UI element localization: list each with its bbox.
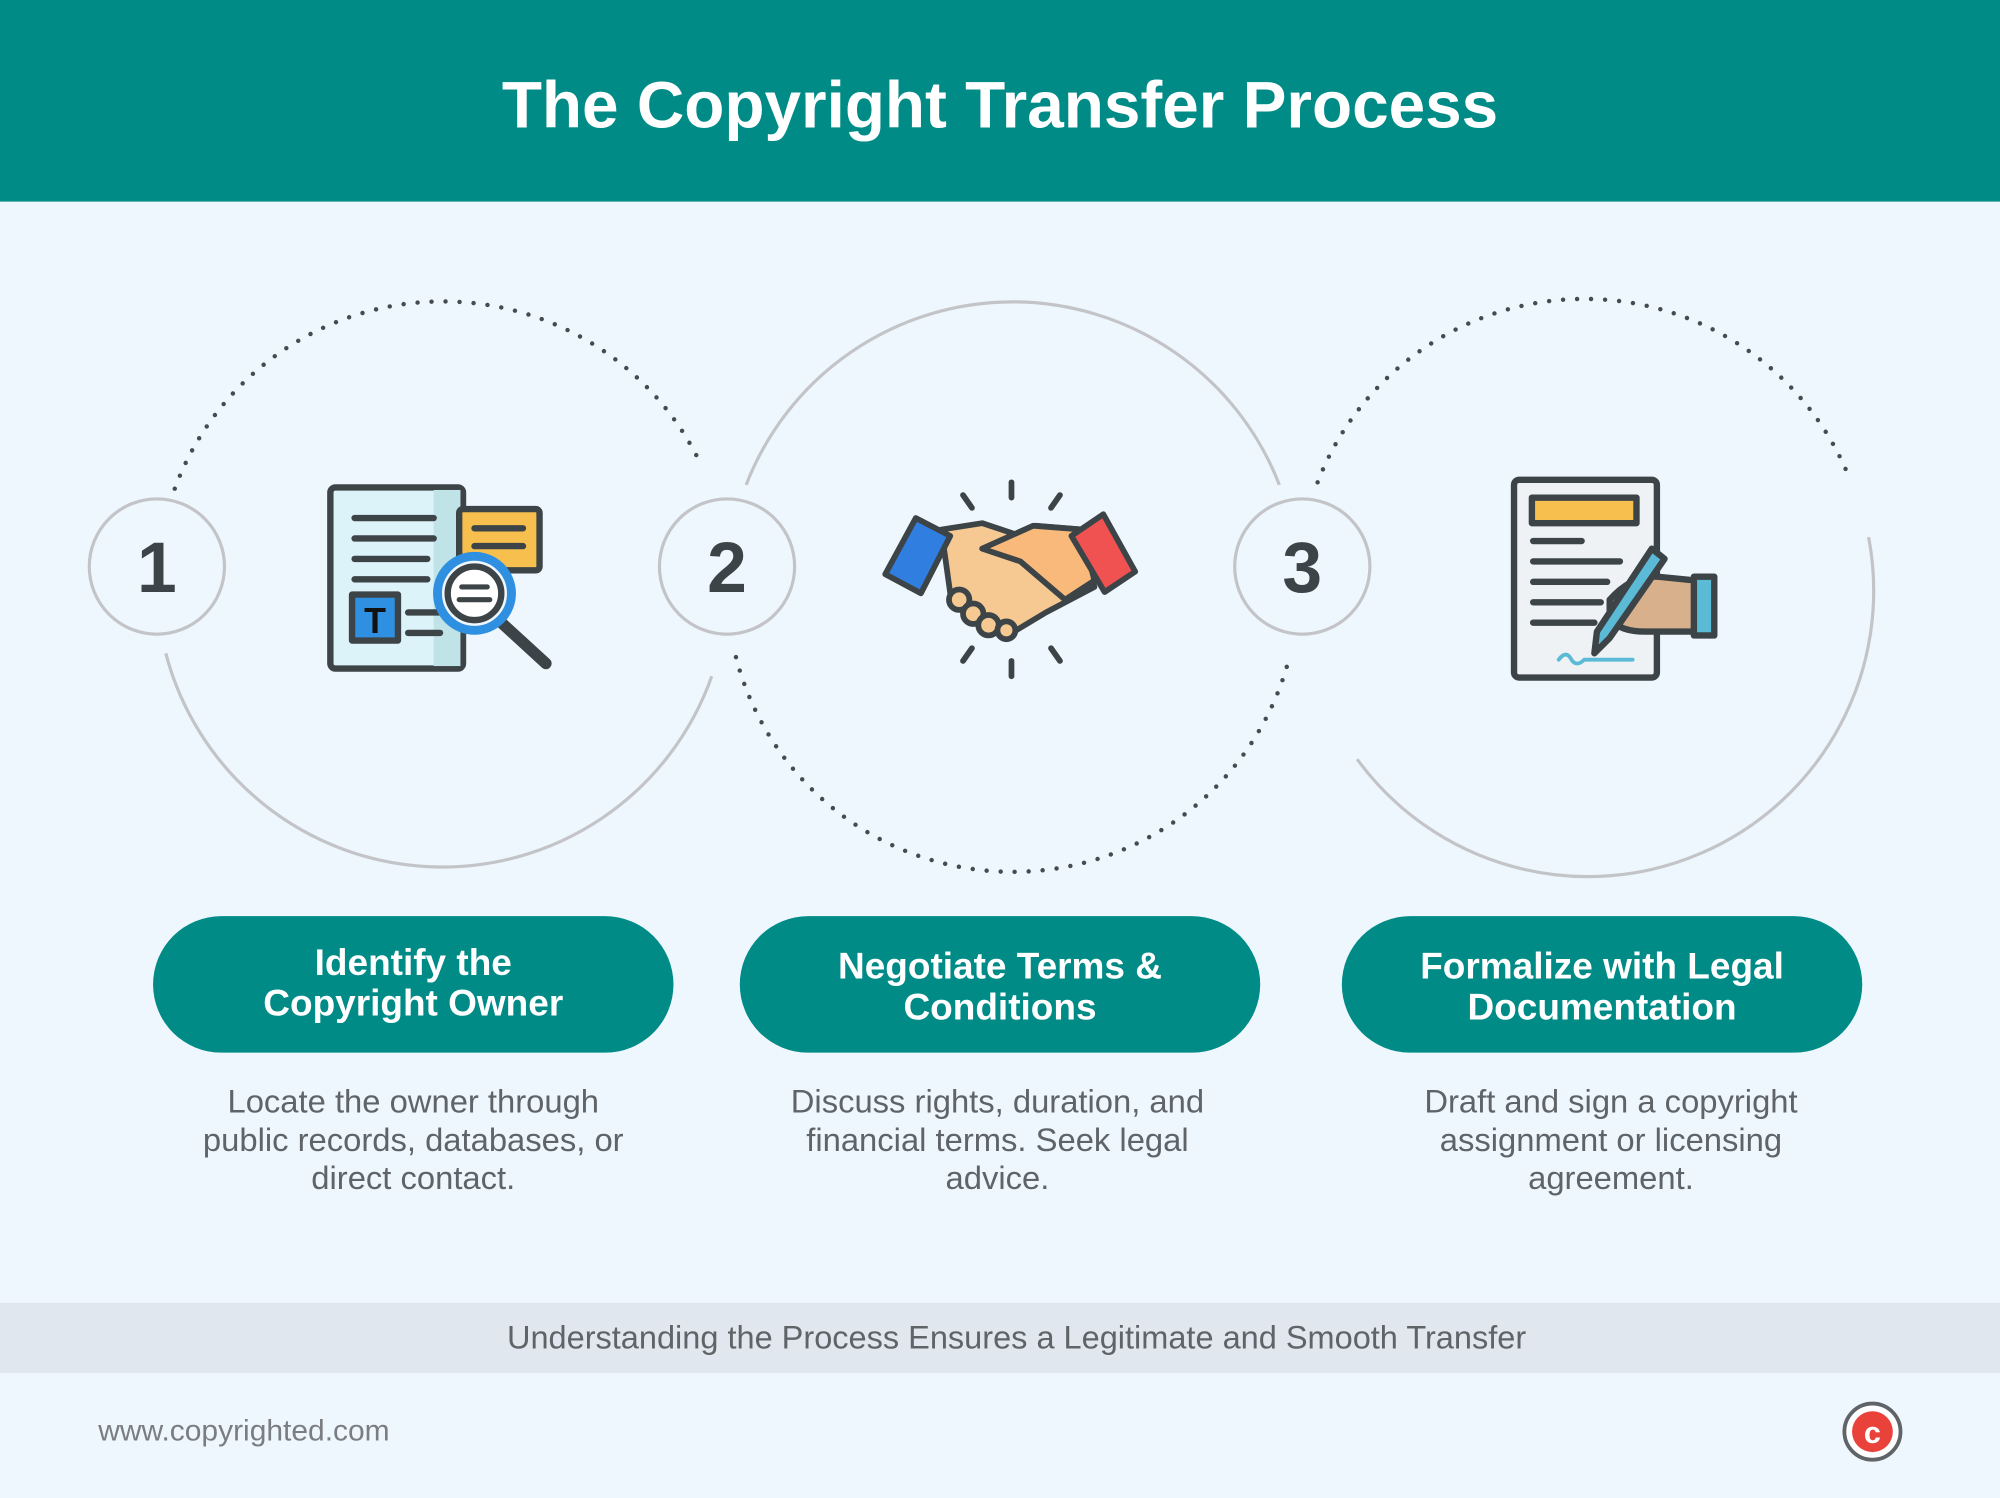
description 2: financial terms. Seek legal	[806, 1121, 1189, 1158]
circle 1 arcs	[166, 301, 712, 867]
circle 3 arcs	[1318, 299, 1874, 877]
number badge 1: 1	[137, 528, 177, 608]
footer band: Understanding the Process Ensures a Legitimate and Smooth Transfer	[507, 1320, 1526, 1356]
description 2: advice.	[946, 1159, 1049, 1196]
description 3: agreement.	[1528, 1159, 1694, 1196]
pill 1	[153, 916, 673, 1053]
icon: document search: T	[364, 601, 386, 641]
number badge 2	[659, 499, 795, 634]
description 2	[791, 1083, 1204, 1196]
pill 2: Negotiate Terms &	[838, 946, 1162, 987]
description 1	[203, 1083, 624, 1196]
description 3: Draft and sign a copyright	[1424, 1083, 1798, 1120]
pill 3	[1342, 916, 1862, 1053]
number badge 1	[89, 499, 224, 634]
icon: handshake	[885, 482, 1135, 676]
description 2: Discuss rights, duration, and	[791, 1083, 1204, 1120]
number badge 3	[1235, 499, 1370, 634]
logo	[1844, 1404, 1901, 1460]
footer band	[0, 1303, 2000, 1373]
pill 2	[740, 916, 1260, 1053]
number badge 3: 3	[1282, 528, 1322, 608]
header banner	[0, 0, 2000, 202]
logo: c	[1864, 1416, 1881, 1450]
title: The Copyright Transfer Process	[502, 69, 1498, 142]
pill 2: Conditions	[903, 987, 1097, 1028]
description 1: direct contact.	[311, 1159, 515, 1196]
icon: document search	[330, 487, 546, 669]
circle 2 arcs	[736, 302, 1287, 872]
number badge 2: 2	[707, 528, 747, 608]
website: www.copyrighted.com	[97, 1415, 390, 1448]
pill 3: Formalize with Legal	[1420, 946, 1784, 987]
description 3	[1424, 1083, 1798, 1196]
pill 1: Copyright Owner	[263, 983, 563, 1024]
description 1: public records, databases, or	[203, 1121, 624, 1158]
description 3: assignment or licensing	[1440, 1121, 1782, 1158]
pill 3: Documentation	[1467, 987, 1737, 1028]
pill 1: Identify the	[315, 942, 512, 983]
icon: signing document	[1514, 480, 1714, 678]
description 1: Locate the owner through	[227, 1083, 599, 1120]
